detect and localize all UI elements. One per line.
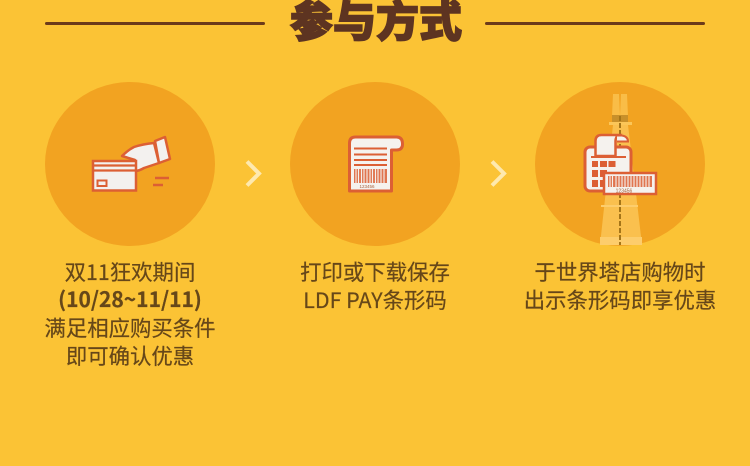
right title rule (485, 22, 705, 25)
arrow: step 1 to 2 (247, 162, 259, 186)
caption: step 3 (524, 256, 716, 315)
icon: barcode receipt (350, 137, 402, 191)
icon: POS terminal and barcode (585, 135, 656, 194)
caption: step 1: 双11狂欢期间 (65, 256, 195, 287)
caption: step 2: LDF PAY条形码 (303, 284, 447, 315)
caption: step 3: 出示条形码即享优惠 (524, 284, 716, 315)
icon: card and hand (93, 137, 170, 190)
arrow: step 2 to 3 (492, 162, 504, 186)
left title rule (45, 22, 265, 25)
caption: step 2: 打印或下载保存 (300, 256, 450, 287)
circle: step 2 (290, 82, 460, 246)
circle: step 1 (45, 82, 215, 246)
caption: step 1: (10/28~11/11) (58, 284, 202, 314)
caption: step 1: 满足相应购买条件 (44, 312, 216, 343)
caption: step 2 (300, 256, 450, 315)
caption: step 1: 即可确认优惠 (66, 340, 194, 371)
icon: barcode receipt: 123456 (359, 184, 375, 189)
caption: step 1 (44, 256, 216, 371)
caption: step 3: 于世界塔店购物时 (534, 256, 706, 287)
step 3 circle with tower (535, 82, 705, 246)
icon: POS terminal and barcode: 123456 (616, 188, 633, 194)
